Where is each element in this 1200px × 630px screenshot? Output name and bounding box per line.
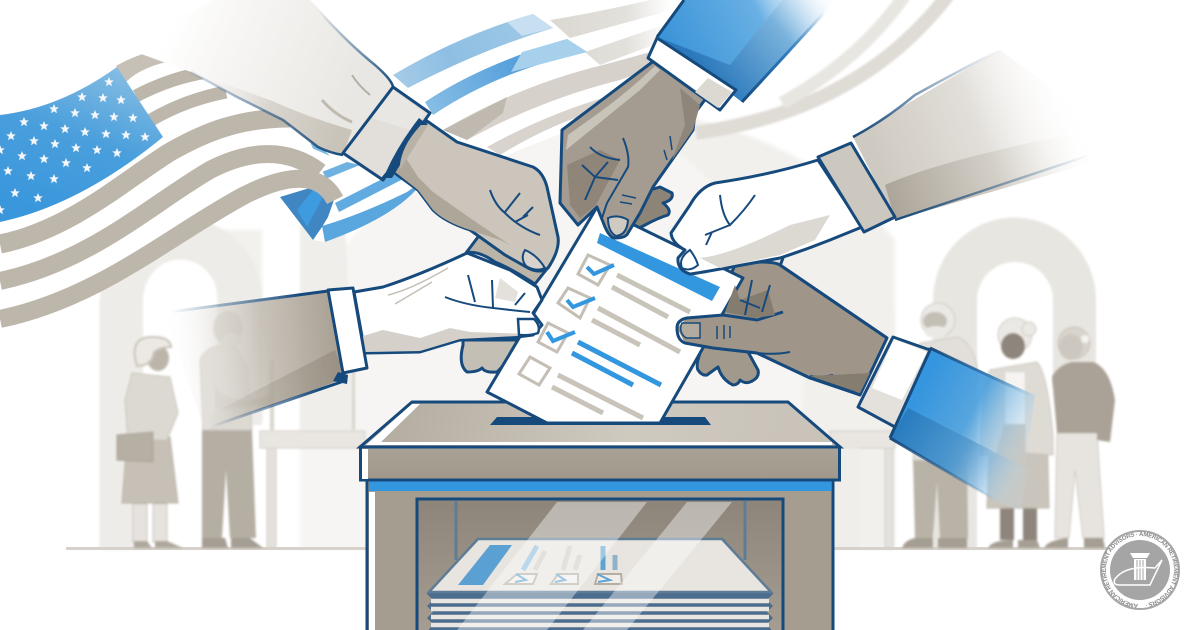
fingers: top hand: [632, 187, 672, 232]
fingers behind ballot: [461, 187, 887, 395]
arch right: [933, 217, 1096, 549]
stack of ballots in box: [427, 538, 773, 630]
checkbox 3: [538, 323, 568, 352]
flag fold: [280, 185, 335, 240]
blue band: [369, 481, 831, 491]
table left: [260, 330, 365, 548]
table right: [830, 431, 895, 548]
box body: [367, 480, 833, 630]
lower band white: [313, 130, 445, 242]
flag canton: [0, 67, 163, 222]
box lid: [360, 402, 840, 447]
back flag blue band second: [425, 39, 587, 115]
box window: [417, 499, 783, 630]
cuff: upper right: [818, 143, 895, 232]
arch right pillar: [840, 310, 894, 430]
fingers: lower left hand: [461, 340, 518, 372]
woman right: [980, 318, 1053, 548]
box front band: [360, 447, 840, 480]
man left: [200, 311, 275, 548]
woman left: [117, 337, 183, 548]
cuff: lower left: [328, 288, 367, 373]
flag arcs top right: [696, 0, 948, 133]
hand: lower left, white: [328, 253, 542, 373]
flag: back, blue stripes: [280, 0, 672, 242]
background arches: [100, 217, 1096, 549]
lower bands blue: [287, 133, 330, 156]
sleeve: top, blue: [657, 0, 840, 102]
arch middle: [300, 220, 355, 549]
sleeve: lower right, blue: [890, 348, 1035, 510]
ballot slot: [490, 417, 711, 425]
hand: upper right: [671, 143, 895, 274]
ballot text lines: [552, 275, 690, 418]
cuff: top: [648, 38, 736, 110]
checkbox 2: [558, 288, 590, 318]
flag: front, stars and stripes: [0, 50, 335, 319]
logo pillar: [1130, 553, 1150, 580]
man right: [902, 303, 977, 548]
hand: lower right thumb: [677, 265, 930, 427]
ballot box: [360, 402, 840, 630]
flag stripes: [0, 85, 335, 319]
hand: lower right, body behind ballot: [700, 262, 887, 395]
floor line: [66, 547, 1114, 550]
sleeve: upper left: [130, 0, 393, 155]
arch left: [100, 218, 262, 549]
logo: American Retirement Advisors seal: AMERICAN RETIREMENT ADVISORS · AMERICAN RETIREMENT ADVISORS ·: [1102, 532, 1178, 608]
hand: top: [560, 38, 736, 238]
cuff: upper left: [343, 87, 430, 180]
back flag blue band top: [393, 14, 553, 88]
background dome: [100, 100, 895, 549]
checkbox 4: [519, 357, 550, 385]
people left: [117, 311, 275, 548]
man far right: [1044, 327, 1115, 548]
fingers: upper left hand: [466, 228, 550, 284]
flag stars: [0, 77, 150, 214]
glass reflections: [457, 502, 732, 630]
checkbox 1: [578, 255, 610, 285]
ballot paper: [487, 207, 743, 423]
ballot header bar: [597, 233, 720, 301]
back flag gray bands: [443, 48, 665, 140]
fingers: lower right hand: [697, 345, 758, 385]
cuff: lower right: [858, 337, 930, 427]
people right: [902, 303, 1115, 548]
fingers: upper right hand: [717, 246, 783, 285]
back flag tan stripes upper: [550, 0, 672, 38]
hand: upper left: [343, 87, 558, 271]
sleeve: upper right: [853, 50, 1095, 220]
sleeve: lower left: [165, 291, 348, 430]
